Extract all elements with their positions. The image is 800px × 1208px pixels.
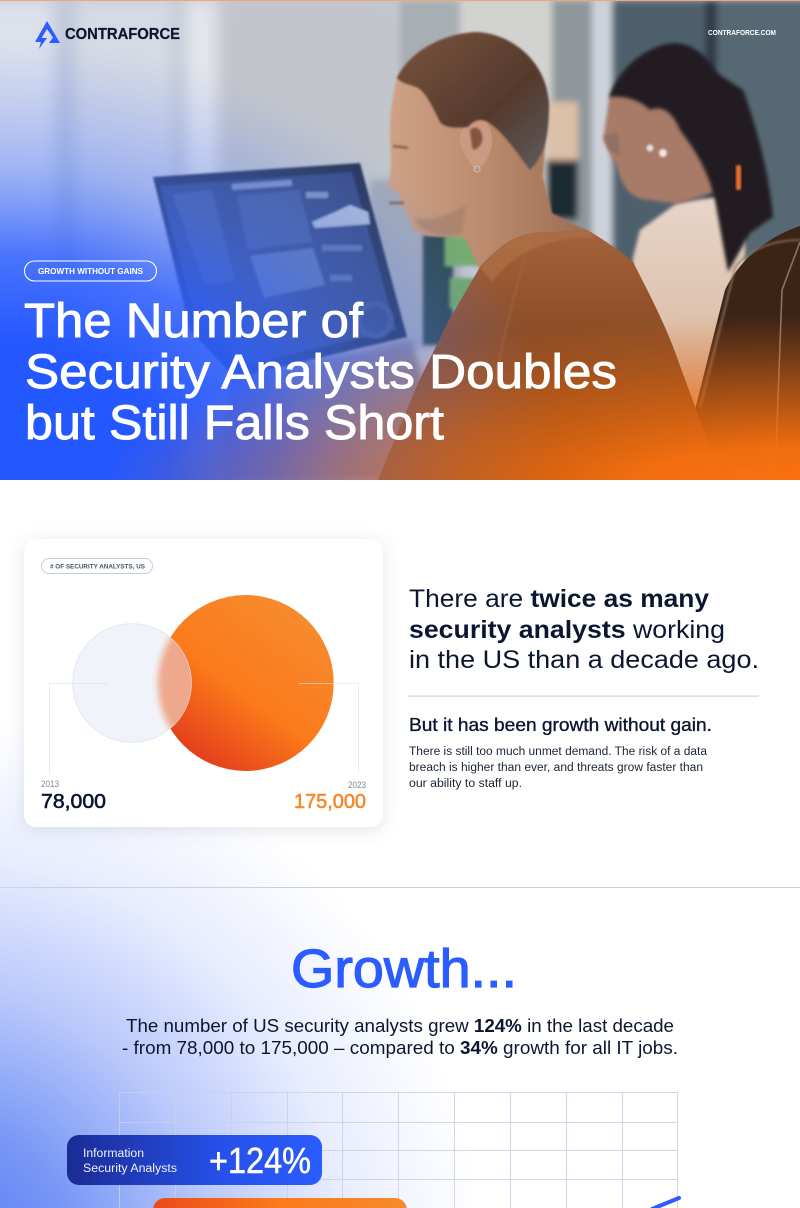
logo wordmark: CONTRAFORCE xyxy=(65,26,180,43)
supporting paragraph: breach is higher than ever, and threats grow faster than xyxy=(409,762,703,774)
logo icon xyxy=(35,21,60,49)
section divider line xyxy=(0,887,800,888)
2023 value xyxy=(294,780,366,813)
monitor xyxy=(153,163,407,378)
title: Security Analysts Doubles xyxy=(25,346,617,399)
label: information security analysts: +124% xyxy=(209,1140,311,1181)
second analyst xyxy=(600,40,776,408)
supporting paragraph: our ability to staff up. xyxy=(409,778,522,790)
2023 value: 2023 xyxy=(348,780,366,791)
statement: in the US than a decade ago. xyxy=(409,646,759,674)
blue gradient overlay xyxy=(0,61,526,480)
label: information security analysts: Security Analysts xyxy=(83,1163,177,1175)
statement: There are twice as many xyxy=(409,585,709,613)
logo xyxy=(35,21,180,49)
green screen xyxy=(423,235,483,345)
text block: growth summary xyxy=(122,1016,678,1058)
page background glow xyxy=(0,700,800,1208)
2013 value: 78,000 xyxy=(41,791,106,813)
tag pill xyxy=(24,261,156,281)
main analyst xyxy=(378,32,722,480)
panel: analysts comparison card xyxy=(24,539,383,827)
trend line xyxy=(652,1198,679,1208)
text block: growth summary: The number of US security analysts grew 124% in the last decade xyxy=(126,1016,674,1036)
title: but Still Falls Short xyxy=(25,397,444,450)
card tag xyxy=(42,558,152,574)
2023 value: 175,000 xyxy=(294,791,366,813)
2013 value: 2013 xyxy=(41,779,59,790)
title: The Number of xyxy=(24,295,364,348)
tag pill: GROWTH WITHOUT GAINS xyxy=(38,266,143,276)
chart grid xyxy=(119,1092,678,1208)
venn chart: 2013 vs 2023 xyxy=(50,595,358,773)
text block: growth summary: - from 78,000 to 175,000 – compared to 34% growth for all IT jobs. xyxy=(122,1038,678,1058)
statement xyxy=(409,585,759,674)
desk and keyboard xyxy=(234,339,424,480)
text block: twice as many xyxy=(408,585,759,790)
subheading: But it has been growth without gain. xyxy=(409,715,712,735)
chair xyxy=(696,226,800,452)
hero photo: office scene with analysts xyxy=(0,0,800,480)
label: information security analysts: Information xyxy=(83,1148,144,1160)
panel: hero banner xyxy=(0,0,800,480)
2013 value xyxy=(41,779,106,813)
orange gradient overlay xyxy=(120,322,800,480)
card background xyxy=(24,539,383,827)
heading: growth: Growth... xyxy=(291,939,517,999)
statement: security analysts working xyxy=(409,616,725,644)
website url: CONTRAFORCE.COM xyxy=(708,28,776,37)
label: information security analysts xyxy=(67,1135,322,1185)
divider xyxy=(408,696,759,697)
card tag: # OF SECURITY ANALYSTS, US xyxy=(50,564,146,570)
top accent line xyxy=(0,0,800,1)
supporting paragraph xyxy=(409,746,708,790)
supporting paragraph: There is still too much unmet demand. The risk of a data xyxy=(409,746,708,758)
label: all IT jobs xyxy=(153,1198,407,1208)
line chart xyxy=(67,1092,679,1208)
title xyxy=(24,302,616,440)
